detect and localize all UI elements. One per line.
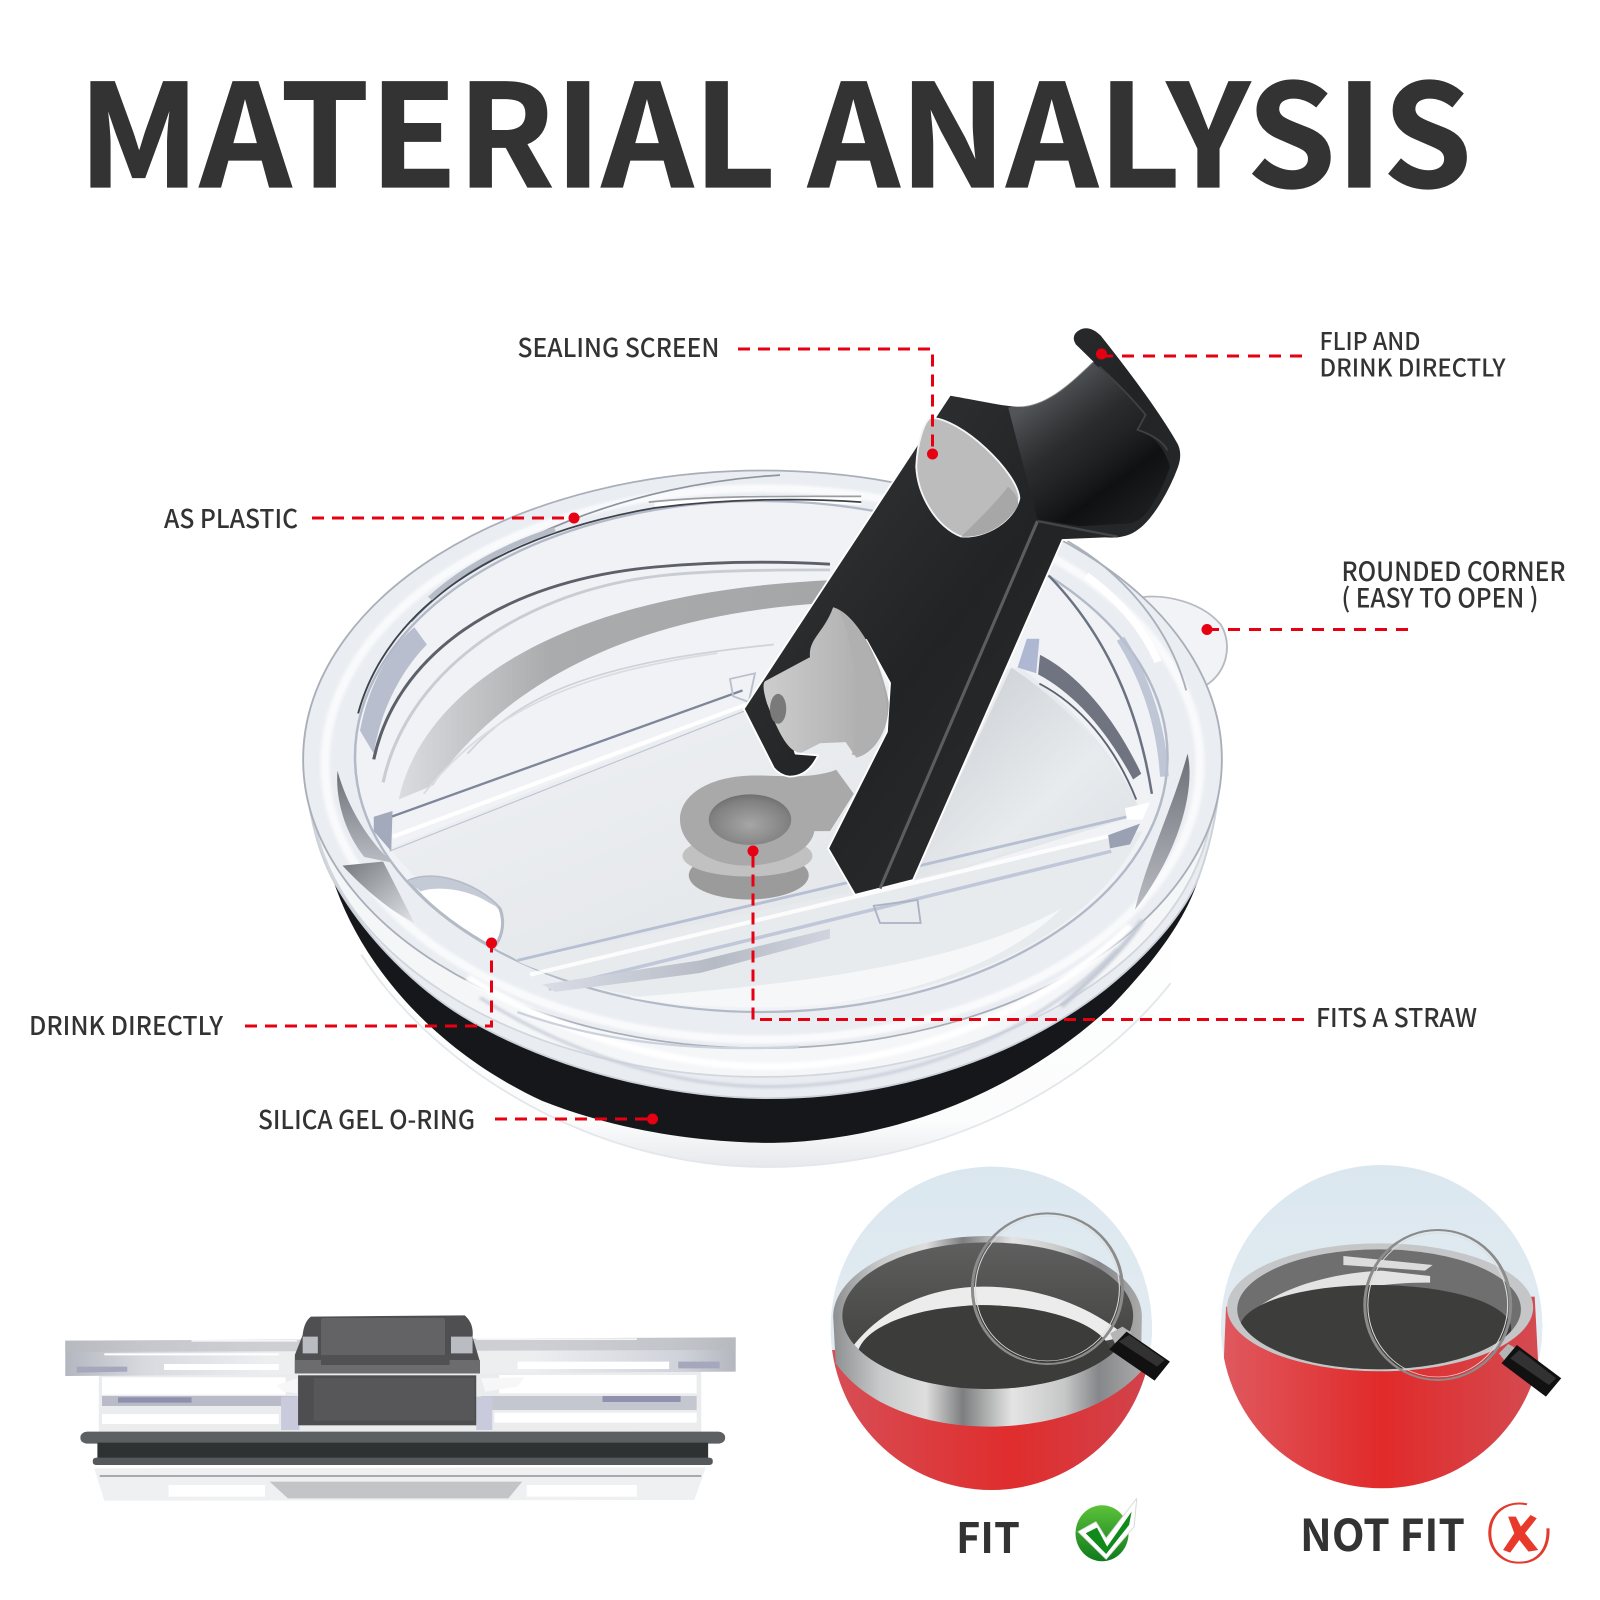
callout: rounded corner: ROUNDED CORNER	[1342, 550, 1566, 589]
callout: sealing screen	[518, 328, 938, 460]
right floor wedge	[911, 667, 1139, 883]
callout: fits a straw	[748, 846, 1477, 1035]
handle lower block	[298, 1375, 476, 1425]
tumbler interior	[1237, 1249, 1521, 1369]
divider ribs	[374, 673, 1150, 992]
not fit illustration: lid ring too small	[1218, 1165, 1561, 1490]
callout: silica gel O-ring	[258, 1100, 658, 1137]
title: MATERIAL ANALYSIS	[78, 22, 1472, 228]
lower wall	[99, 1372, 701, 1432]
callout: fits a straw: FITS A STRAW	[1316, 998, 1477, 1035]
rounded corner tab	[1136, 597, 1227, 686]
lid underside skirt	[361, 874, 1171, 1167]
tumbler interior	[842, 1242, 1133, 1389]
icon: green check	[1076, 1498, 1137, 1561]
side view of lid	[65, 1315, 736, 1501]
handle upper block	[295, 1315, 480, 1373]
straw stopper plug	[764, 607, 889, 758]
lid floor panel	[389, 667, 1141, 960]
dark refraction slits in rim	[337, 754, 1190, 1006]
sealing screen plug	[916, 418, 1019, 537]
fit label: FIT	[956, 1505, 1020, 1566]
fit illustration: lid ring matches tumbler	[820, 1167, 1170, 1493]
drinking opening	[408, 877, 503, 948]
transparent outer rim	[303, 471, 1222, 1098]
callout: rounded corner	[1202, 550, 1566, 635]
callout: drink directly	[29, 938, 497, 1043]
lower floor wedge	[518, 831, 1142, 1007]
main product: clear tumbler lid with flip handle	[303, 327, 1227, 1167]
handle cup shading	[1008, 362, 1170, 526]
top rim	[65, 1337, 736, 1376]
sky circle	[1221, 1165, 1542, 1488]
red tumbler body	[832, 1350, 1146, 1490]
magnifier: not fit	[1365, 1230, 1561, 1397]
inner well wall	[355, 501, 1168, 1012]
callout: silica gel O-ring: SILICA GEL O-RING	[258, 1100, 475, 1137]
magnifier: fit	[972, 1213, 1170, 1381]
not fit label: NOT FIT	[1300, 1500, 1465, 1564]
callout: rounded corner: ( EASY TO OPEN )	[1342, 576, 1538, 616]
plug hole	[770, 694, 786, 724]
steel band	[833, 1236, 1142, 1427]
callout: drink directly: DRINK DIRECTLY	[29, 1006, 224, 1043]
callout: flip and drink directly: FLIP AND	[1320, 323, 1420, 358]
callout: AS plastic	[164, 499, 580, 536]
ring hole	[709, 794, 791, 845]
inner steel ring	[850, 1287, 1127, 1353]
sky circle	[831, 1167, 1152, 1490]
gray reflection band	[399, 580, 830, 800]
gray silicone ring and strap	[680, 770, 854, 899]
callout: sealing screen: SEALING SCREEN	[518, 328, 720, 365]
callout: AS plastic: AS PLASTIC	[164, 499, 298, 536]
callout: flip and drink directly: DRINK DIRECTLY	[1320, 350, 1506, 384]
lower clear base	[94, 1467, 706, 1501]
icon: red cross	[1490, 1504, 1548, 1563]
inner steel ring	[1260, 1270, 1430, 1306]
O-ring	[80, 1432, 725, 1444]
thin steel rim	[1227, 1243, 1533, 1371]
black flip handle	[744, 327, 1181, 895]
silicone O-ring	[333, 759, 1200, 1143]
red tumbler body	[1218, 1297, 1545, 1490]
callout: flip and drink directly	[1096, 323, 1506, 384]
right wall glints	[1018, 541, 1186, 800]
